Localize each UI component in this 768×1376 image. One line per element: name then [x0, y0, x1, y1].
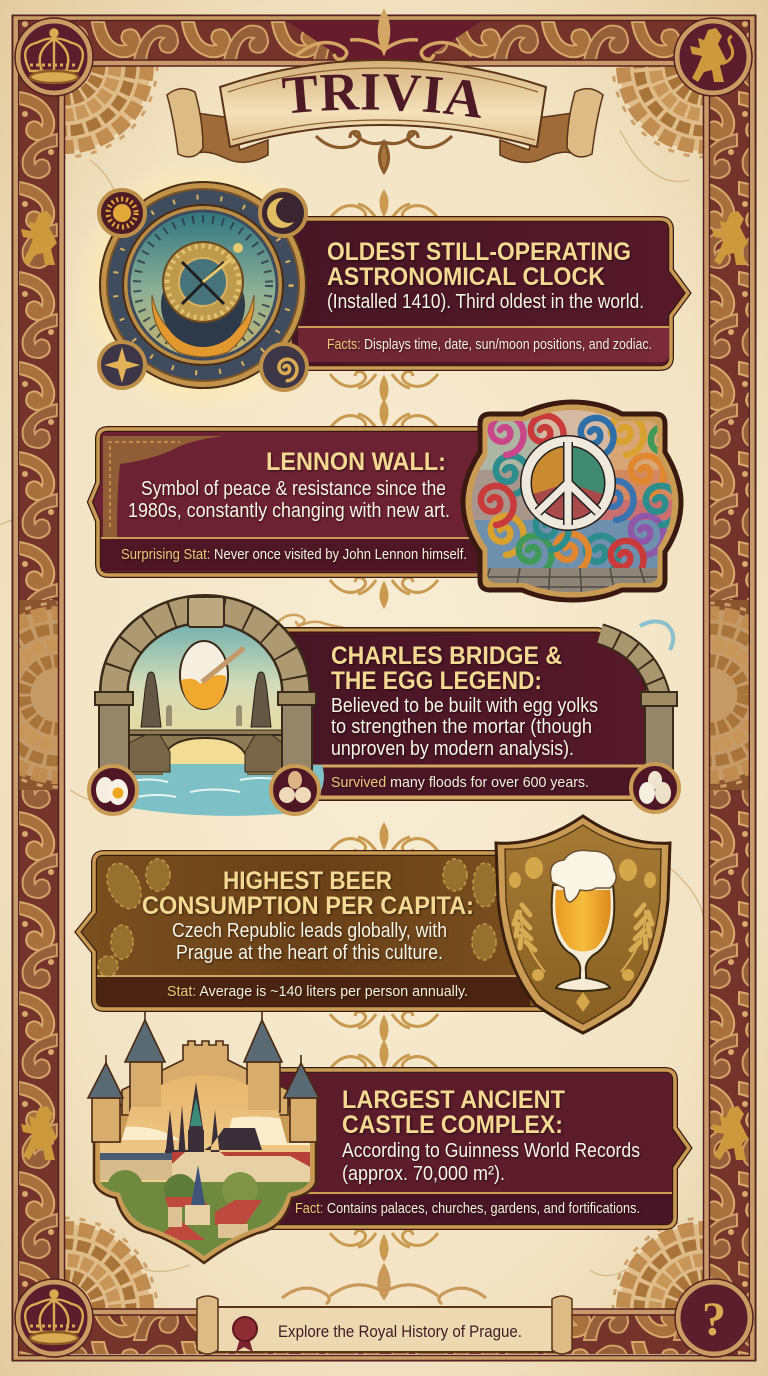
icon: shield with beer glass	[496, 816, 670, 1033]
castle scene	[100, 1075, 310, 1256]
icon: astronomical clock	[100, 182, 306, 388]
decorative hops	[98, 858, 497, 976]
ribbon left fold	[196, 113, 268, 162]
ribbon left roll	[167, 89, 203, 157]
beer heading	[142, 867, 474, 920]
castle heading: CASTLE COMPLEX:	[342, 1111, 563, 1139]
clock fact text: Facts: Displays time, date, sun/moon positions, and zodiac.	[327, 336, 652, 353]
ornament above card 1	[330, 192, 438, 220]
ornament below card 2	[330, 578, 438, 606]
castle heading: LARGEST ANCIENT	[342, 1086, 565, 1114]
beer body text: Czech Republic leads globally, with	[172, 920, 447, 942]
bridge footer strip	[290, 766, 648, 797]
beer heading: HIGHEST BEER	[223, 867, 392, 895]
panel: beer text box	[78, 853, 540, 1009]
ornament below card 4	[330, 1012, 438, 1040]
card 4: beer consumption	[78, 825, 540, 1040]
beer glass	[552, 885, 614, 991]
wheat left	[521, 910, 545, 972]
castle fact text: Fact: Contains palaces, churches, gardens, and fortifications.	[295, 1200, 640, 1217]
scroll left roll	[197, 1296, 218, 1354]
panel: castle text box	[240, 1070, 689, 1227]
icon: wax seal	[233, 1317, 257, 1352]
top flourish	[296, 12, 472, 59]
ornament above card 3	[278, 615, 344, 628]
ornament above card 2	[330, 402, 438, 430]
medallion: question mark bottom right	[675, 1279, 753, 1357]
footer text: Explore the Royal History of Prague.	[278, 1322, 522, 1341]
medallion: crown bottom left	[15, 1279, 93, 1357]
icon: sun medallion	[99, 190, 145, 236]
bridge body text: to strengthen the mortar (though	[331, 716, 592, 738]
icon: moon medallion	[260, 190, 306, 236]
Lennon body text: 1980s, constantly changing with new art.	[128, 500, 450, 522]
Lennon heading: LENNON WALL:	[266, 448, 446, 476]
medallion: question mark bottom right: ?	[702, 1293, 726, 1346]
castle body text: (approx. 70,000 m²).	[342, 1163, 505, 1185]
beer body text	[172, 920, 447, 964]
title banner	[166, 59, 604, 164]
title text	[284, 110, 486, 119]
scroll right roll	[552, 1296, 572, 1354]
panel: bridge text box	[280, 630, 650, 798]
beer stat text: Stat: Average is ~140 liters per person annually.	[167, 983, 468, 1000]
beer body text: Prague at the heart of this culture.	[176, 942, 443, 964]
icon: stone arch with bridge and egg	[95, 597, 324, 816]
icon: Lennon wall peace mural	[460, 400, 685, 600]
side lion emblem left upper	[21, 211, 57, 265]
icon: castle shield	[88, 1012, 319, 1263]
sky and bridge scene	[129, 626, 281, 775]
hops on shield	[509, 857, 656, 1012]
castle heading	[342, 1086, 565, 1139]
bridge body text	[331, 695, 598, 760]
ornament below card 1	[330, 372, 438, 400]
ribbon right fold	[500, 113, 573, 162]
icon: egg medallion left	[89, 766, 137, 814]
stone arch	[114, 609, 296, 692]
bridge heading: CHARLES BRIDGE &	[331, 642, 562, 670]
card 1: astronomical clock	[290, 192, 688, 400]
castle towers and walls	[88, 1012, 319, 1142]
ornament above card 4	[330, 825, 438, 854]
footer scroll	[197, 1296, 572, 1354]
icon: right stone arch fragment	[600, 621, 677, 770]
ribbon right roll	[567, 89, 603, 157]
egg with spoon	[180, 641, 244, 709]
medallion: crown top left	[15, 18, 93, 96]
bridge survival text: Survived many floods for over 600 years.	[331, 774, 589, 791]
ornament above card 5	[330, 1043, 438, 1072]
side lion emblem left lower	[21, 1106, 57, 1160]
river	[107, 765, 324, 816]
side lion emblem right upper	[712, 211, 748, 265]
Lennon body text	[128, 478, 450, 522]
ornament below card 5	[330, 1230, 438, 1259]
title banner: TRIVIA	[282, 74, 481, 118]
panel: Lennon text box	[90, 429, 490, 575]
icon: egg medallion right	[631, 764, 679, 812]
bridge body text: unproven by modern analysis).	[331, 738, 574, 760]
bridge heading: THE EGG LEGEND:	[331, 667, 542, 695]
card 5: castle complex	[240, 1043, 689, 1259]
ribbon body	[220, 60, 546, 147]
card 2: Lennon Wall	[90, 402, 491, 606]
wheat right	[621, 910, 645, 972]
icon: swirl medallion	[261, 344, 307, 390]
Lennon footer strip	[101, 538, 491, 571]
castle footer strip	[250, 1193, 672, 1224]
clock heading: OLDEST STILL-OPERATING	[327, 238, 631, 266]
side lion emblem right lower	[712, 1106, 748, 1160]
castle body text	[342, 1140, 640, 1185]
footer flourish	[282, 1266, 486, 1304]
shield outline	[94, 1105, 316, 1263]
Lennon stat text: Surprising Stat: Never once visited by John Lennon himself.	[121, 546, 467, 563]
beer footer strip	[97, 976, 530, 1006]
Lennon corner ornament	[103, 436, 224, 537]
bridge heading	[331, 642, 562, 695]
castle body text: According to Guinness World Records	[342, 1140, 640, 1162]
medallion: lion top right	[674, 18, 752, 96]
Lennon body text: Symbol of peace & resistance since the	[141, 478, 446, 500]
bridge body text: Believed to be built with egg yolks	[331, 695, 598, 717]
clock glow	[71, 155, 335, 419]
icon: egg medallion centre	[271, 766, 319, 814]
clock body text: (Installed 1410). Third oldest in the world.	[327, 291, 644, 313]
clock footer strip	[298, 327, 669, 362]
panel: clock text box	[290, 219, 688, 368]
banner lower flourish	[316, 132, 452, 172]
card 3: Charles Bridge	[278, 615, 677, 798]
clock heading: ASTRONOMICAL CLOCK	[327, 263, 605, 291]
icon: star medallion	[99, 342, 145, 388]
clock heading	[327, 238, 631, 291]
beer heading: CONSUMPTION PER CAPITA:	[142, 892, 474, 920]
